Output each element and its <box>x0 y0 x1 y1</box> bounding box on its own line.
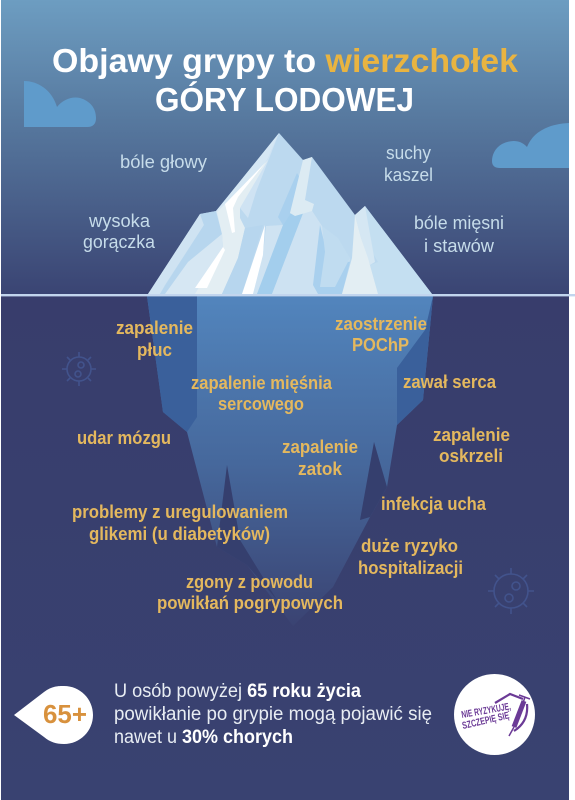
label: zapalenie zatok: zapalenie <box>282 437 358 457</box>
left dark notch <box>217 465 277 600</box>
label: bóle mięsni i stawów: bóle mięsni <box>414 213 504 233</box>
badge: nie ryzykuję, szczepię się: SZCZEPIĘ SIĘ <box>461 710 511 732</box>
label: udar mózgu: udar mózgu <box>77 428 171 448</box>
label: bóle mięsni i stawów <box>414 213 504 256</box>
badge: nie ryzykuję, szczepię się <box>454 674 535 755</box>
title <box>52 42 519 118</box>
text block: 65+ fact <box>114 681 432 748</box>
label: zapalenie zatok: zatok <box>298 459 343 479</box>
icon: virus right <box>488 568 534 614</box>
label: zgony z powodu powikłań pogrypowych <box>157 572 343 613</box>
label: zapalenie płuc: zapalenie <box>116 318 193 338</box>
label: infekcja ucha: infekcja ucha <box>381 494 487 514</box>
label: duże ryzyko hospitalizacji <box>358 536 463 578</box>
callout: 65+ bubble <box>14 686 93 744</box>
icon: right cloud <box>492 123 569 168</box>
callout: 65+ bubble: 65+ <box>43 699 87 729</box>
iceberg below water <box>147 296 433 626</box>
badge: nie ryzykuję, szczepię się: NIE RYZYKUJĘ, <box>461 701 512 721</box>
label: zgony z powodu powikłań pogrypowych: powikłań pogrypowych <box>157 593 343 613</box>
right dark notch <box>360 442 387 520</box>
label: zapalenie zatok <box>282 437 358 479</box>
icon: virus left <box>62 352 96 386</box>
text block: 65+ fact: U osób powyżej 65 roku życia <box>114 681 361 702</box>
title: Objawy grypy to wierzchołek <box>52 42 519 79</box>
right darker face <box>397 296 433 425</box>
panel: sea background <box>1 295 569 800</box>
label: zaostrzenie POChP <box>335 314 427 355</box>
label: zapalenie oskrzeli: zapalenie <box>433 425 510 445</box>
icon: left cloud <box>24 81 96 127</box>
title: GÓRY LODOWEJ <box>155 81 414 118</box>
label: bóle mięsni i stawów: i stawów <box>424 236 495 256</box>
label: problemy z uregulowaniem glikemi: glikemi (u diabetyków) <box>89 524 270 544</box>
label: duże ryzyko hospitalizacji: hospitalizacji <box>358 558 463 578</box>
label: suchy kaszel: suchy <box>386 143 431 163</box>
label: problemy z uregulowaniem glikemi: problemy z uregulowaniem <box>72 502 288 522</box>
label: wysoka gorączka: wysoka <box>88 211 151 231</box>
label: zapalenie mięśnia sercowego: zapalenie mięśnia <box>191 373 333 393</box>
label: wysoka gorączka <box>83 211 156 252</box>
label: suchy kaszel: kaszel <box>384 165 433 185</box>
text block: 65+ fact: nawet u 30% chorych <box>114 727 293 748</box>
label: zapalenie płuc <box>116 318 193 360</box>
label: zapalenie mięśnia sercowego: sercowego <box>218 394 304 414</box>
label: suchy kaszel <box>384 143 433 185</box>
icon: shield and syringe <box>495 694 530 736</box>
label: zgony z powodu powikłań pogrypowych: zgony z powodu <box>186 572 313 592</box>
label: zapalenie mięśnia sercowego <box>191 373 333 414</box>
label: zaostrzenie POChP: POChP <box>352 335 409 355</box>
left darker face <box>147 296 197 432</box>
label: zaostrzenie POChP: zaostrzenie <box>335 314 427 334</box>
label: duże ryzyko hospitalizacji: duże ryzyko <box>361 536 458 556</box>
water line <box>1 294 575 296</box>
iceberg above water <box>148 133 432 294</box>
label: problemy z uregulowaniem glikemi <box>72 502 288 544</box>
text block: 65+ fact: powikłanie po grypie mogą pojawić się <box>114 704 432 725</box>
label: zapalenie oskrzeli: oskrzeli <box>439 446 503 466</box>
label: wysoka gorączka: gorączka <box>83 232 156 252</box>
label: zapalenie oskrzeli <box>433 425 510 466</box>
label: zawał serca: zawał serca <box>403 372 497 392</box>
label: zapalenie płuc: płuc <box>137 340 172 360</box>
label: bóle głowy: bóle głowy <box>120 152 207 172</box>
panel: sky background <box>1 0 569 295</box>
